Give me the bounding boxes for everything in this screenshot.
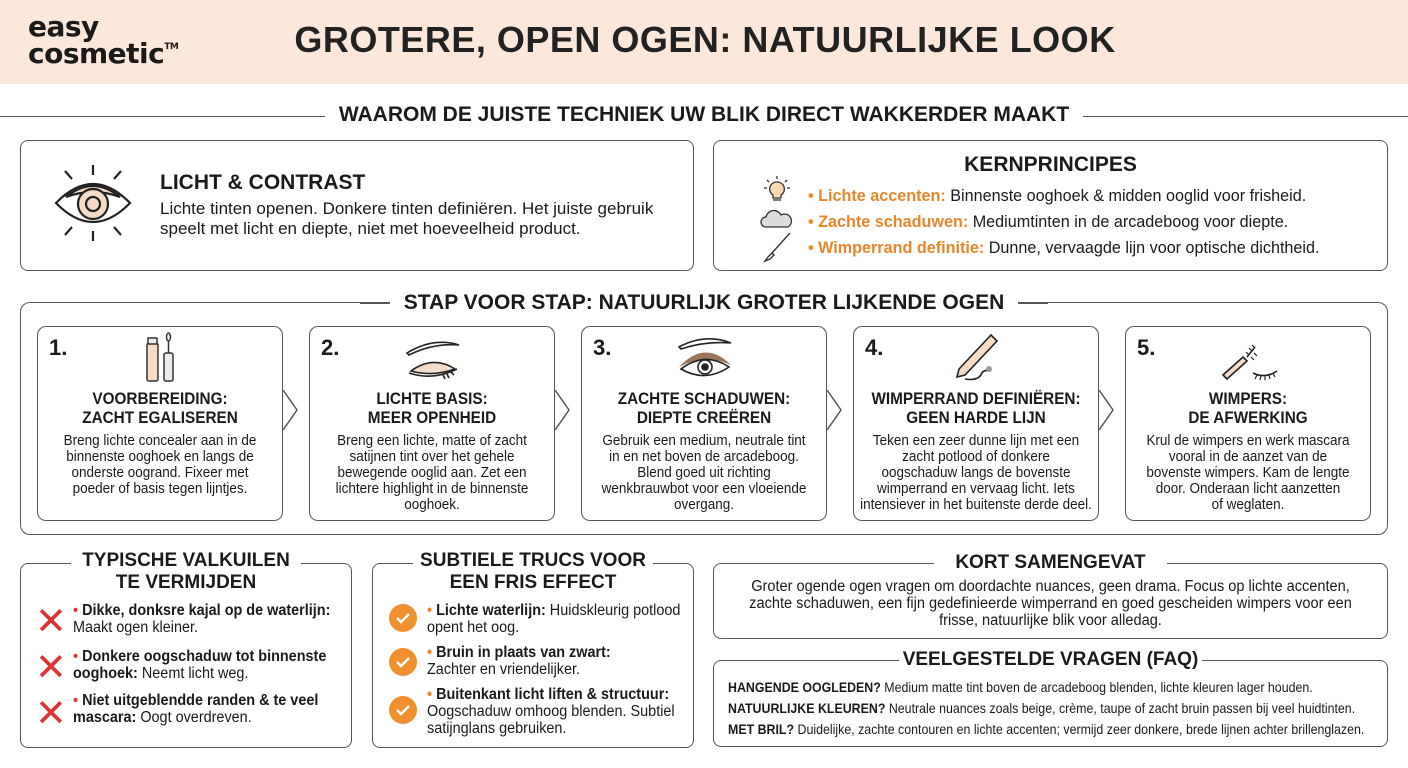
icon: mascara: [1222, 344, 1278, 380]
heading: trucs: [413, 550, 653, 594]
list: valkuilen: ✕: [35, 599, 67, 643]
step 2: [309, 326, 555, 521]
step 4: GEEN HARDE LIJN: [906, 408, 1046, 427]
text: samenvatting: frisse, natuurlijke blik voor alledag.: [939, 612, 1162, 629]
icon: pencil: [956, 334, 998, 380]
text: faq: NATUURLIJKE KLEUREN? Neutrale nuances zoals beige, crème, taupe of zacht bruin passen bij veel huidtinten.: [728, 700, 1355, 716]
text: faq: HANGENDE OOGLEDEN? Medium matte tint boven de arcadeboog blenden, lichte kleuren lager houden.: [728, 679, 1313, 695]
step 4: wimperrand en vervaag licht. Iets: [877, 481, 1075, 497]
step 5: door. Onderaan licht aanzetten: [1156, 481, 1340, 497]
step 2: lichtere highlight in de binnenste: [336, 481, 528, 497]
step 2: satijnen tint over het gehele: [350, 449, 514, 465]
step 3: Blend goed uit richting: [637, 465, 771, 481]
heading: kort samengevat: KORT SAMENGEVAT: [955, 552, 1146, 573]
step 4: [853, 326, 1099, 521]
heading: valkuilen: [71, 550, 301, 594]
text: licht & contrast: LICHT & CONTRAST: [160, 171, 365, 194]
step 3: overgang.: [674, 497, 734, 513]
list: trucs: • Buitenkant licht liften & structuur:: [427, 686, 669, 703]
step 1: ZACHT EGALISEREN: [82, 408, 238, 427]
step 4: WIMPERRAND DEFINIËREN:: [871, 389, 1081, 408]
step 2: Breng een lichte, matte of zacht: [337, 433, 527, 449]
list: valkuilen: • Donkere oogschaduw tot binnenste: [73, 648, 326, 665]
panel: trucs: [372, 563, 694, 748]
icon: eye shadow: [678, 338, 732, 376]
icon: eyelid: [406, 342, 460, 380]
step 3: [581, 326, 827, 521]
step 4: oogschaduw langs de bovenste: [882, 465, 1070, 481]
list: principes: • Wimperrand definitie: Dunne, vervaagde lijn voor optische dichtheid.: [808, 239, 1320, 257]
step 2: bewegende ooglid aan. Zet een: [338, 465, 526, 481]
step 3: Gebruik een medium, neutrale tint: [602, 433, 806, 449]
list: valkuilen: • Niet uitgeblendde randen & te veel: [73, 692, 318, 709]
title: GROTERE, OPEN OGEN: NATUURLIJKE LOOK: [294, 19, 1116, 60]
list: trucs: Oogschaduw omhoog blenden. Subtiel: [427, 703, 675, 720]
heading: stap voor stap: STAP VOOR STAP: NATUURLIJK GROTER LIJKENDE OGEN: [404, 291, 1004, 314]
step 2: ooghoek.: [404, 497, 460, 513]
panel: kort samengevat: [713, 563, 1388, 639]
list: valkuilen: ✕: [35, 645, 67, 689]
step 5: of weglaten.: [1212, 497, 1284, 513]
step 5: WIMPERS:: [1209, 389, 1287, 408]
heading: trucs: SUBTIELE TRUCS VOOR: [420, 550, 646, 571]
list: trucs: Zachter en vriendelijker.: [427, 661, 580, 678]
step 3: in en net boven de arcadeboog.: [609, 449, 799, 465]
step 4: 4.: [865, 335, 883, 360]
logo: cosmeticTM: [28, 37, 178, 70]
list: principes: [808, 187, 1320, 257]
icon: cloud: [760, 210, 792, 228]
icon: concealer: [146, 332, 174, 382]
text: samenvatting: zachte schaduwen, een fijn gedefinieerde wimperrand en goed gescheiden wimpers voor een: [749, 595, 1352, 612]
step 1: Breng lichte concealer aan in de: [64, 433, 256, 449]
list: trucs: • Bruin in plaats van zwart:: [427, 644, 611, 661]
list: valkuilen: [35, 599, 330, 735]
step 3: wenkbrauwbot voor een vloeiende: [602, 481, 806, 497]
list: trucs: opent het oog.: [427, 619, 519, 636]
heading: faq: VEELGESTELDE VRAGEN (FAQ): [903, 649, 1198, 670]
panel: licht & contrast: [20, 140, 694, 271]
icon: eye: [54, 165, 132, 241]
heading: kernprincipes: KERNPRINCIPES: [964, 153, 1137, 176]
text: samenvatting: [749, 578, 1352, 629]
text: samenvatting: Groter ogende ogen vragen om doordachte nuances, geen drama. Focus op lichte accenten,: [751, 578, 1350, 595]
list: valkuilen: ✕: [35, 691, 67, 735]
text: licht & contrast: Lichte tinten openen. Donkere tinten definiëren. Het juiste gebruik: [160, 199, 653, 218]
section heading: waarom: WAAROM DE JUISTE TECHNIEK UW BLIK DIRECT WAKKERDER MAAKT: [339, 103, 1069, 126]
step 1: onderste oogrand. Fixeer met: [72, 465, 248, 481]
arrow 4: [1099, 390, 1114, 430]
list: valkuilen: mascara: Oogt overdreven.: [73, 709, 252, 726]
list: valkuilen: ooghoek: Neemt licht weg.: [73, 665, 248, 682]
panel: stap voor stap: [20, 302, 1388, 535]
step 5: 5.: [1137, 335, 1155, 360]
panel: faq: [713, 660, 1388, 747]
list: trucs: [389, 602, 680, 737]
list: trucs: • Lichte waterlijn: Huidskleurig potlood: [427, 602, 680, 619]
list: valkuilen: • Dikke, donksre kajal op de waterlijn:: [73, 602, 330, 619]
heading: trucs: EEN FRIS EFFECT: [450, 572, 616, 593]
step 2: LICHTE BASIS:: [376, 389, 488, 408]
text: licht & contrast: [160, 171, 654, 238]
step 5: [1125, 326, 1371, 521]
step 1: VOORBEREIDING:: [92, 389, 228, 408]
logo: [28, 10, 178, 70]
step 4: intensiever in het buitenste derde deel.: [860, 497, 1092, 513]
step 4: Teken een zeer dunne lijn met een: [873, 433, 1079, 449]
heading: valkuilen: TYPISCHE VALKUILEN: [82, 550, 290, 571]
icon: bulb: [764, 176, 790, 201]
text: licht & contrast: speelt met licht en diepte, niet met hoeveelheid product.: [160, 219, 581, 238]
step 4: zacht potlood of donkere: [902, 449, 1050, 465]
step 2: MEER OPENHEID: [368, 408, 496, 427]
step 3: DIEPTE CREËREN: [637, 408, 771, 427]
list: valkuilen: Maakt ogen kleiner.: [73, 619, 198, 636]
step 5: DE AFWERKING: [1188, 408, 1308, 427]
logo: easy: [28, 10, 99, 43]
arrow 1: [283, 390, 298, 430]
text: faq: [728, 679, 1364, 737]
step 3: ZACHTE SCHADUWEN:: [618, 389, 790, 408]
text: faq: MET BRIL? Duidelijke, zachte contouren en lichte accenten; vermijd zeer donkere, brede lijnen achter brillenglazen.: [728, 721, 1364, 737]
panel: valkuilen: [20, 563, 352, 748]
step 5: Krul de wimpers en werk mascara: [1146, 433, 1350, 449]
header band: [0, 0, 1408, 84]
step 1: 1.: [49, 335, 67, 360]
arrow 3: [827, 390, 842, 430]
step 5: bovenste wimpers. Kam de lengte: [1146, 465, 1350, 481]
icon: brush: [763, 232, 790, 263]
heading: valkuilen: TE VERMIJDEN: [116, 572, 256, 593]
list: principes: • Lichte accenten: Binnenste ooghoek & midden ooglid voor frisheid.: [808, 187, 1306, 205]
step 3: 3.: [593, 335, 611, 360]
step 1: poeder of basis tegen lijntjes.: [73, 481, 247, 497]
step 5: vooral in de aanzet van de: [1169, 449, 1327, 465]
list: principes: • Zachte schaduwen: Mediumtinten in de arcadeboog voor diepte.: [808, 213, 1288, 231]
step 1: binnenste ooghoek en langs de: [66, 449, 254, 465]
list: trucs: satijnglans gebruiken.: [427, 720, 566, 737]
step 2: 2.: [321, 335, 339, 360]
arrow 2: [555, 390, 570, 430]
step 1: [37, 326, 283, 521]
panel: kernprincipes: [713, 140, 1388, 271]
